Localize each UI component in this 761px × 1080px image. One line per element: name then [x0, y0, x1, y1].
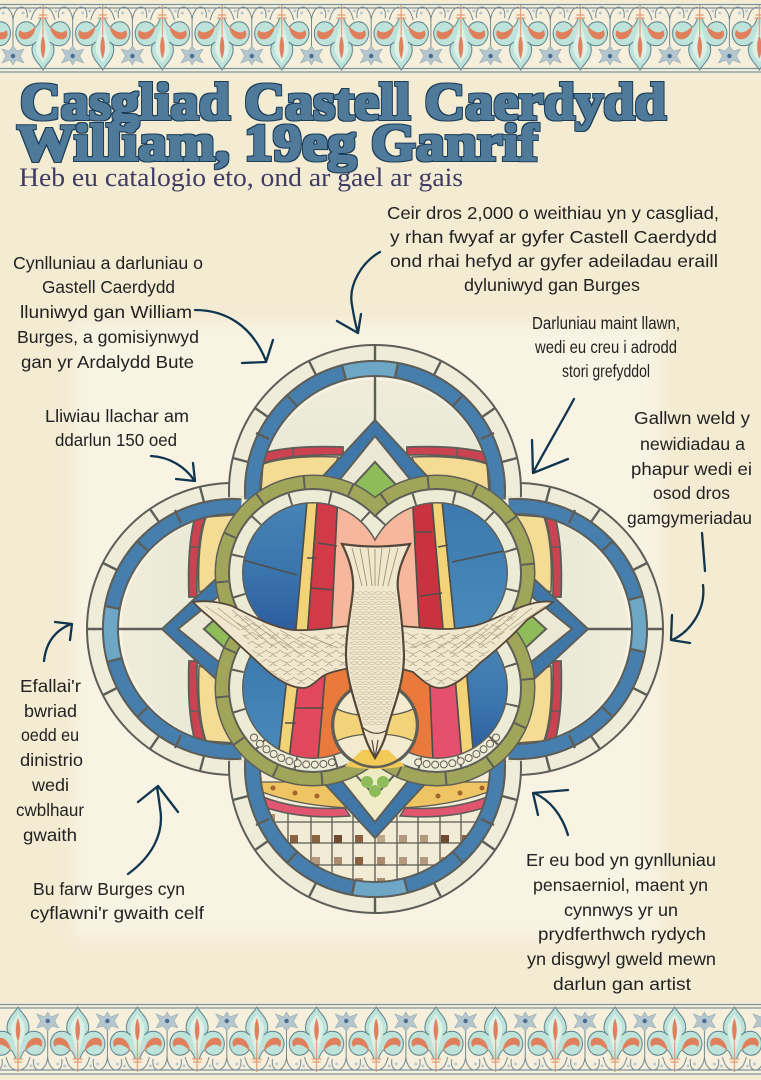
arrow: to junction right — [532, 399, 574, 473]
right wing — [400, 601, 553, 688]
annotation: Er eu bod: darlun gan artist — [553, 974, 691, 994]
annotation: Ceir dros 2,000 — [387, 203, 719, 295]
annotation: Gallwn weld — [627, 408, 752, 528]
pearl border — [254, 738, 496, 765]
annotation: Darluniau maint llawn: stori grefyddol — [562, 361, 650, 381]
dove — [193, 544, 553, 758]
olive rings — [222, 482, 528, 779]
arrow: to left lobe — [44, 622, 72, 661]
annotation: Efallai'r bwriad: dinistrio — [20, 750, 83, 770]
title — [17, 74, 666, 172]
subtitle: Heb eu catalogio eto, ond ar gael ar gais — [19, 163, 463, 192]
annotation: Cynlluniau: gan yr Ardalydd Bute — [21, 352, 194, 372]
annotation: Gallwn weld: osod dros — [653, 483, 730, 503]
arrows — [44, 252, 705, 874]
annotation: Ceir dros 2,000: Ceir dros 2,000 o weithiau yn y casgliad, — [387, 203, 719, 223]
annotation: Darluniau maint llawn: wedi eu creu i adrodd — [534, 337, 677, 357]
annotation: Lliwiau llachar: ddarlun 150 oed — [55, 430, 177, 450]
annotation: Lliwiau llachar: Lliwiau llachar am — [45, 406, 189, 426]
annotation: Er eu bod: yn disgwyl gweld mewn — [527, 949, 716, 969]
annotation: Efallai'r bwriad: gwaith — [23, 825, 77, 845]
title: Casgliad Castell Caerdydd — [20, 74, 666, 131]
annotation: Cynlluniau: lluniwyd gan William — [20, 302, 192, 322]
annotation: Ceir dros 2,000: dyluniwyd gan Burges — [464, 275, 640, 295]
annotation: Bu farw Burges: cyflawni'r gwaith celf — [30, 903, 204, 923]
arrow: to upper left lobe — [195, 310, 273, 363]
lobe: left — [87, 487, 253, 771]
lobe: bottom — [233, 747, 517, 913]
annotation: Er eu bod: pensaerniol, maent yn — [533, 875, 708, 895]
left wing — [193, 601, 350, 688]
annotation: Efallai'r bwriad: bwriad — [24, 701, 77, 721]
top ornamental border — [0, 3, 761, 73]
centre backing — [235, 490, 515, 770]
annotation: Darluniau maint llawn: Darluniau maint llawn, — [532, 313, 680, 333]
lobe: right — [497, 487, 663, 771]
annotation: Efallai'r bwriad: cwblhaur — [16, 800, 84, 820]
arrow: to top lobe — [337, 252, 380, 333]
annotation: Darluniau maint llawn — [532, 313, 680, 381]
annotation: Cynlluniau — [13, 253, 203, 372]
annotation: Efallai'r bwriad: wedi — [31, 775, 69, 795]
halo with cross — [331, 681, 419, 769]
coloured glass panels — [244, 504, 506, 758]
annotation: Cynlluniau: Burges, a gomisiynwyd — [17, 327, 199, 347]
arrow: to left lobe top — [151, 456, 195, 481]
annotation: Lliwiau llachar — [45, 406, 189, 450]
annotation: Cynlluniau: Gastell Caerdydd — [42, 277, 175, 297]
bottom ornamental border — [0, 1004, 761, 1074]
annotation: Er eu bod: Er eu bod yn gynlluniau — [526, 850, 716, 870]
stained glass design — [87, 345, 663, 913]
annotation: Ceir dros 2,000: y rhan fwyaf ar gyfer Castell Caerdydd — [390, 227, 717, 247]
green trefoil — [361, 776, 389, 797]
annotation: Gallwn weld: phapur wedi ei — [631, 459, 752, 479]
annotation: Gallwn weld: Gallwn weld y — [634, 408, 750, 428]
annotation: Bu farw Burges — [30, 879, 204, 923]
annotation: Gallwn weld: gamgymeriadau — [627, 508, 752, 528]
annotation: Er eu bod: cynnwys yr un — [564, 900, 678, 920]
lobe: top — [233, 345, 517, 511]
annotation: Ceir dros 2,000: ond rhai hefyd ar gyfer adeiladau eraill — [390, 251, 718, 271]
title: William, 19eg Ganrif — [17, 115, 539, 172]
arrow: to right lobe — [671, 533, 705, 643]
arrow: to lower right — [533, 790, 568, 835]
paper of the original sketch — [74, 322, 660, 937]
annotation: Er eu bod: prydferthwch rydych — [538, 924, 706, 944]
arrow: to lower left — [128, 786, 178, 874]
annotation: Gallwn weld: newidiadau a — [640, 434, 745, 454]
annotation: Efallai'r bwriad: oedd eu — [21, 725, 79, 745]
body and tail — [342, 544, 410, 758]
annotation: Bu farw Burges: Bu farw Burges cyn — [33, 879, 185, 899]
chequered grid — [271, 814, 476, 881]
annotation: Er eu bod — [526, 850, 716, 994]
annotation: Efallai'r bwriad: Efallai'r — [20, 676, 81, 696]
annotation: Efallai'r bwriad — [16, 676, 84, 845]
annotation: Cynlluniau: Cynlluniau a darluniau o — [13, 253, 203, 273]
